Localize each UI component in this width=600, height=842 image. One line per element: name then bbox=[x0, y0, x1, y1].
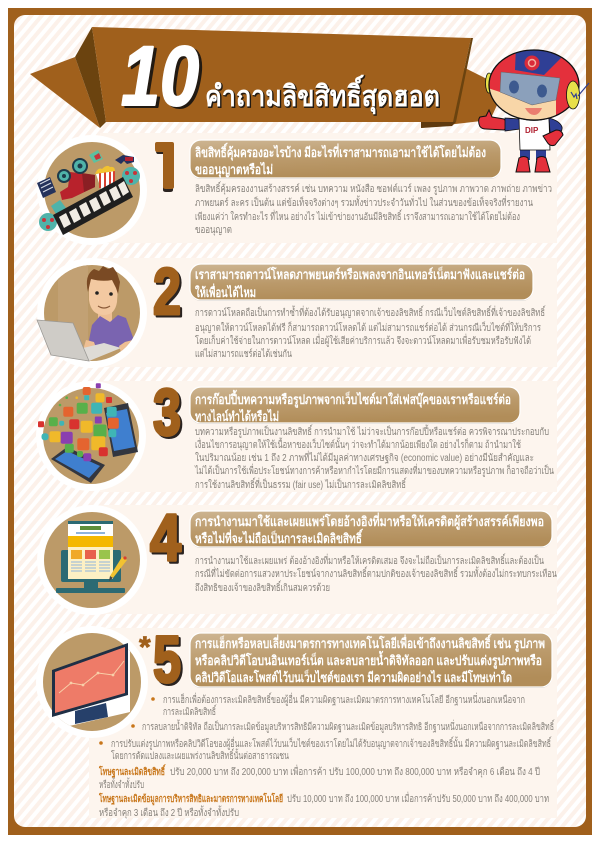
answer text 1 bbox=[195, 181, 552, 236]
title: Thai heading: คำถามลิขสิทธิ์สุดฮอต bbox=[206, 75, 441, 115]
number 3: 3 bbox=[155, 377, 183, 451]
penalty: rights management and technological measures: หรือจำคุก 3 เดือน ถึง 2 ปี หรือทั้งจำทั้งปรับ bbox=[99, 805, 239, 819]
number 4: 4 bbox=[152, 502, 183, 576]
bullet: editing and posting bbox=[99, 736, 552, 762]
section 4 bbox=[37, 500, 557, 615]
question banner 1: ลิขสิทธิ์คุ้มครองอะไรบ้าง มีอะไรที่เราสามารถเอามาใช้ได้โดยไม่ต้อง bbox=[195, 142, 486, 161]
icon: film equipment bbox=[37, 135, 147, 245]
question banner 1: ขออนุญาตหรือไม่ bbox=[195, 161, 273, 178]
penalty: copyright infringement: โทษฐานละเมิดลิขสิทธิ์ bbox=[98, 764, 166, 778]
question banner 3 bbox=[190, 387, 520, 424]
answer text 3: การใช้งานลิขสิทธิ์ที่เป็นธรรม (fair use) ไม่เป็นการละเมิดลิขสิทธิ์ bbox=[195, 477, 407, 491]
bullet: hacking: การละเมิดลิขสิทธิ์ bbox=[163, 704, 217, 718]
question banner 4 bbox=[190, 511, 552, 548]
penalty: rights management and technological measures: โทษฐานละเมิดข้อมูลการบริหารสิทธิและมาตรการทางเทคโนโลยี bbox=[98, 792, 283, 806]
answer text 4: ถึงสิทธิของเจ้าของลิขสิทธิ์เกินสมควรด้วย bbox=[195, 580, 330, 594]
number 5: 5 bbox=[153, 622, 181, 696]
question banner 2: ให้เพื่อนได้ไหม bbox=[195, 283, 256, 300]
number 5: 5 bbox=[155, 624, 183, 698]
icon: monitor with line chart bbox=[36, 626, 148, 738]
title: Thai heading bbox=[205, 74, 441, 115]
answer text 4 bbox=[195, 553, 557, 594]
mascot bbox=[479, 45, 589, 172]
question banner 3: การก๊อปปี้บทความหรือรูปภาพจากเว็บไซต์มาใส่เฟสบุ๊คของเราหรือแชร์ต่อ bbox=[195, 389, 511, 408]
penalty: copyright infringement: หรือทั้งจำทั้งปรับ bbox=[99, 777, 144, 791]
question banner 5 bbox=[190, 633, 552, 688]
title: 10: 10 bbox=[121, 29, 199, 123]
section 1 bbox=[37, 135, 552, 245]
section 2 bbox=[37, 254, 546, 368]
number 2: 2 bbox=[153, 254, 181, 328]
asterisk: * bbox=[139, 631, 151, 664]
answer text 1: ขออนุญาต bbox=[195, 225, 232, 236]
mascot: DIP bbox=[525, 126, 539, 135]
penalty: copyright infringement bbox=[98, 764, 540, 791]
answer text 3 bbox=[194, 424, 554, 491]
number 2: 2 bbox=[155, 256, 183, 330]
number 3: 3 bbox=[153, 375, 181, 449]
answer text 2 bbox=[195, 305, 546, 360]
icon: phones and app icons bbox=[36, 381, 146, 491]
icon: computer with web page bbox=[37, 505, 147, 615]
bullet: hacking bbox=[151, 692, 525, 718]
number 4: 4 bbox=[150, 500, 181, 574]
title ribbon bbox=[30, 27, 505, 128]
question banner 2 bbox=[190, 264, 533, 301]
section 3 bbox=[36, 375, 554, 491]
section 5 bbox=[36, 622, 555, 819]
title: Thai heading: คำถามลิขสิทธิ์สุดฮอต bbox=[205, 74, 440, 114]
answer text 2: แต่ไม่สามารถแชร์ต่อได้เช่นกัน bbox=[195, 348, 292, 360]
icon: man with laptop bbox=[37, 258, 147, 368]
penalty: rights management and technological measures bbox=[98, 791, 549, 819]
question banner 1 bbox=[190, 140, 501, 179]
title: 10: 10 bbox=[124, 31, 202, 125]
question banner 3: ทางไลน์ทำได้หรือไม่ bbox=[195, 408, 279, 424]
bullet: editing and posting: โดยการดัดแปลงและเผยแพร่งานลิขสิทธิ์นั้นต่อสาธารณชน bbox=[111, 748, 289, 762]
panel backgrounds bbox=[89, 133, 557, 818]
number 1 bbox=[155, 142, 174, 192]
question banner 4: หรือไม่ที่จะไม่ถือเป็นการละเมิดลิขสิทธิ์ bbox=[195, 528, 363, 546]
